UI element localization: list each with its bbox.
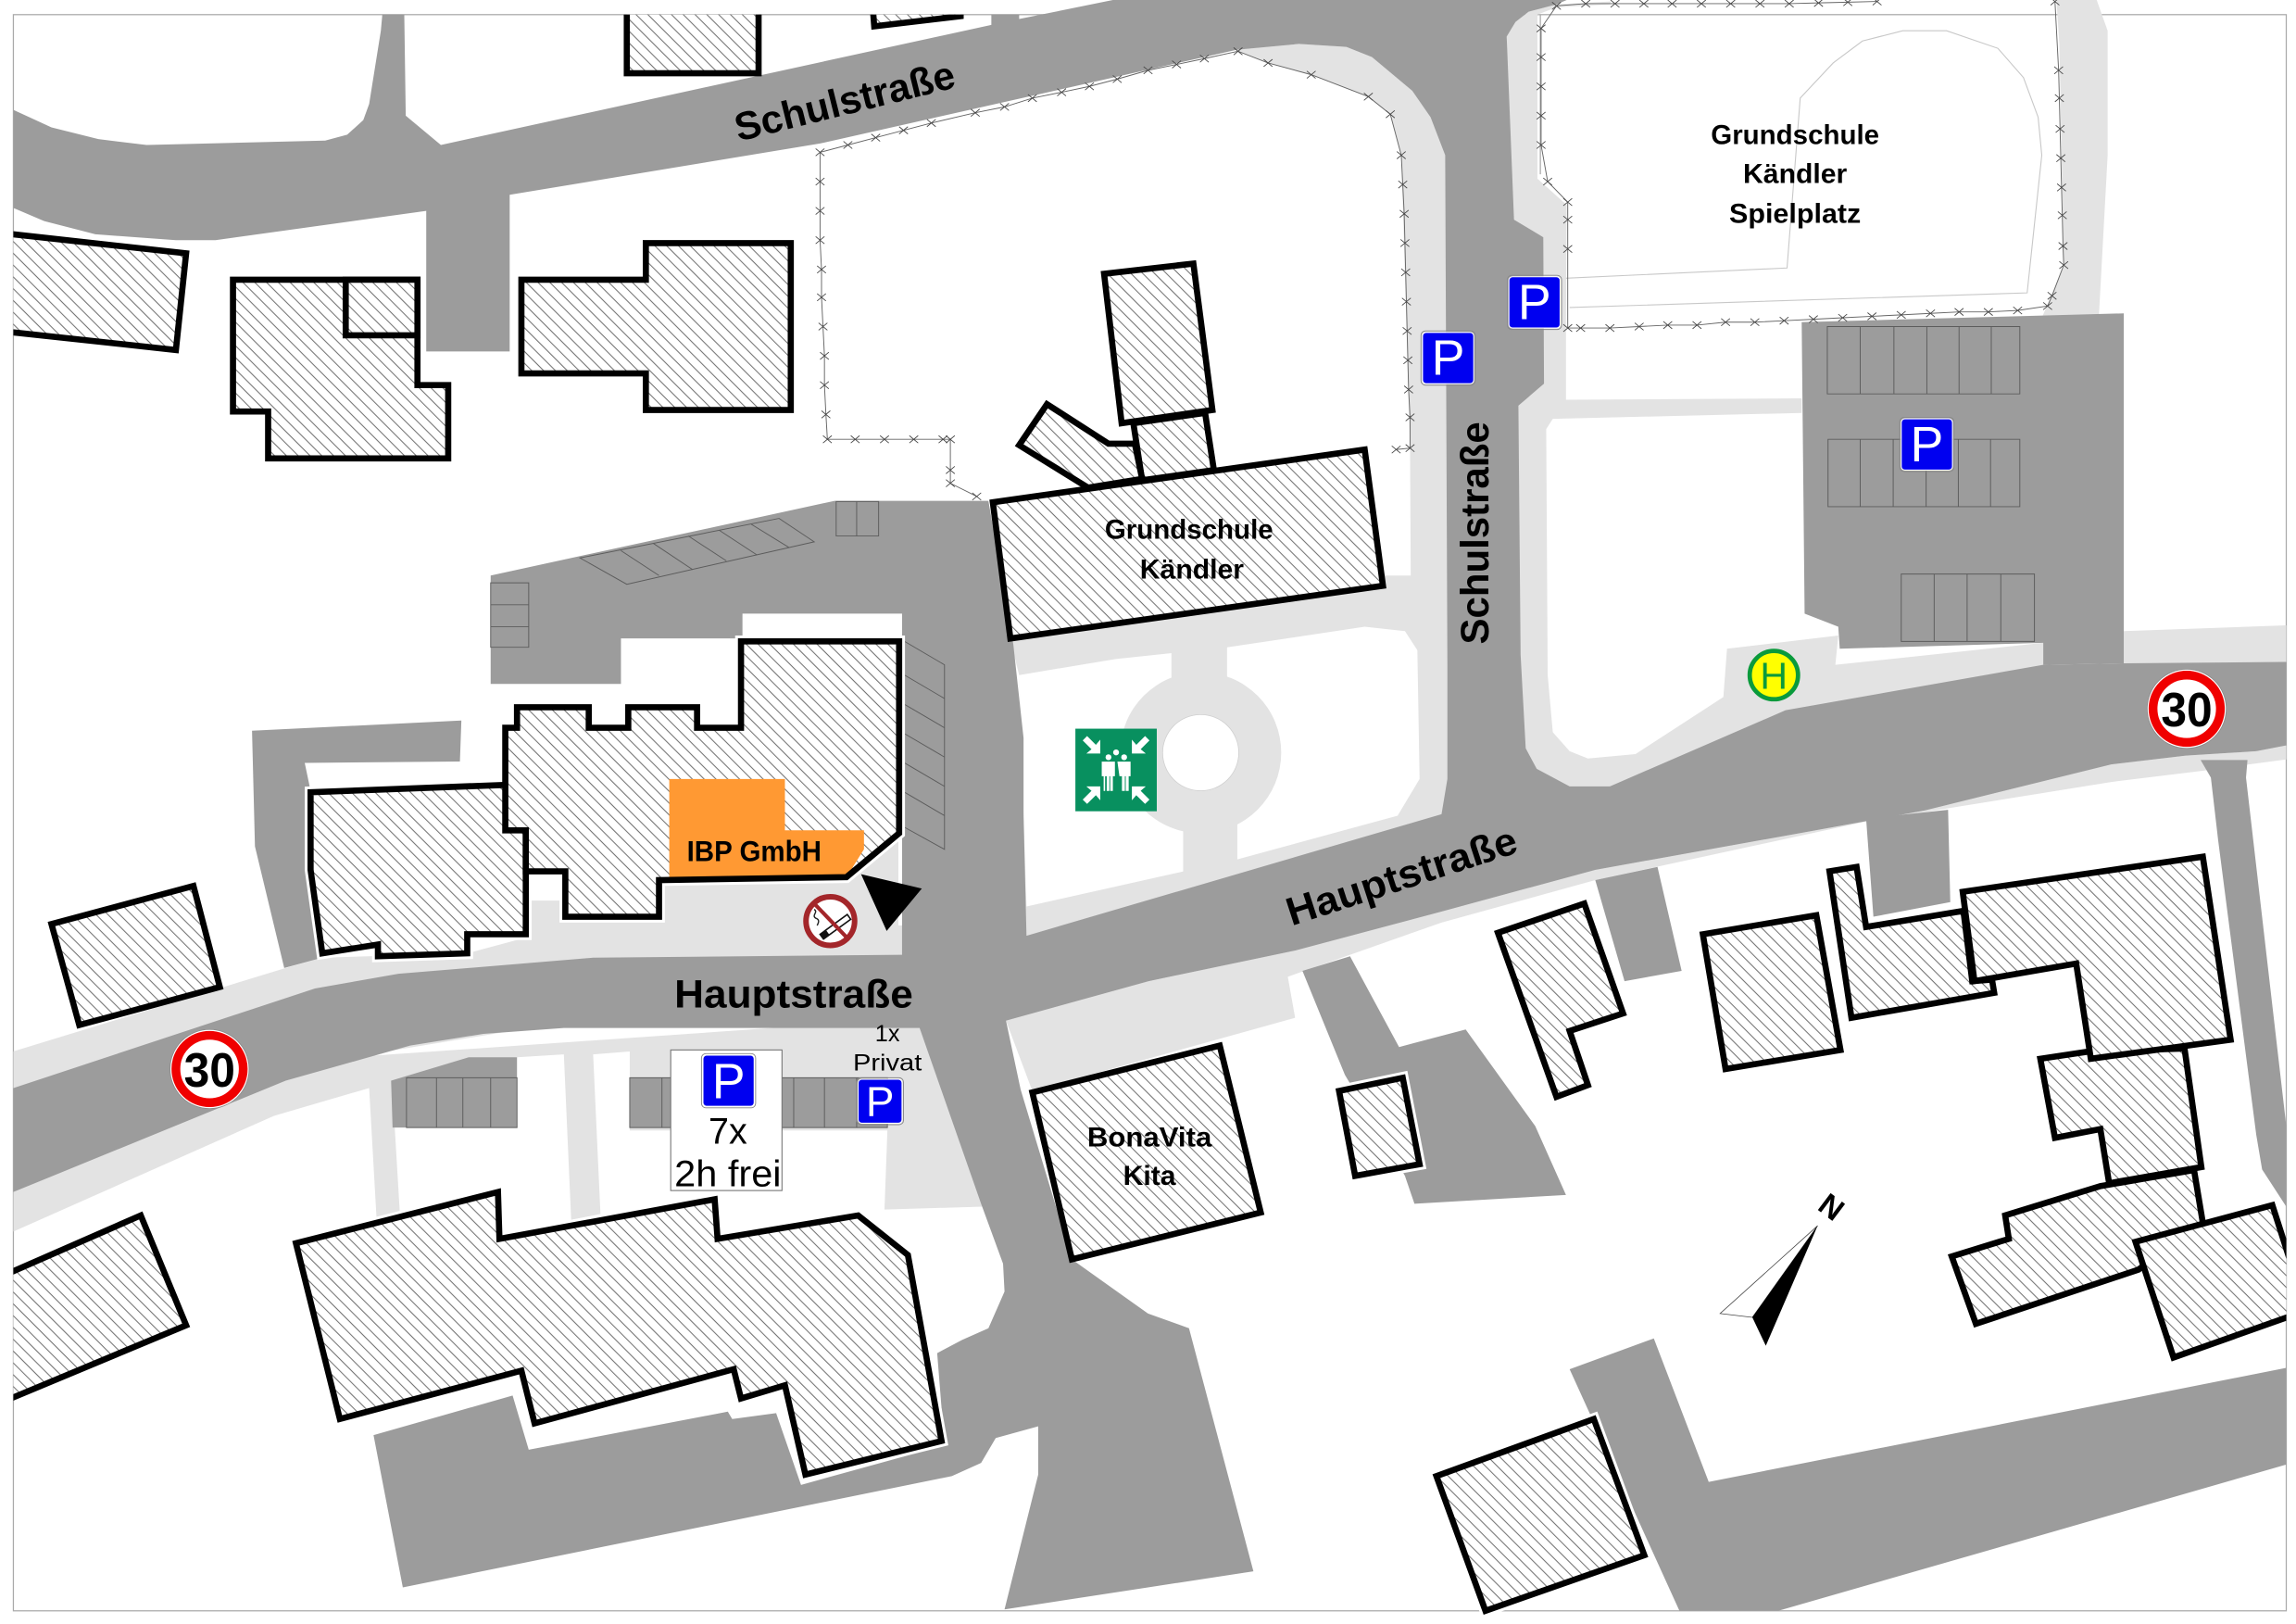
building: BonaVita Kita [1033,1046,1261,1259]
parking info: 1x Privat: 1x [875,1021,900,1047]
plaza with ring [1019,627,1420,906]
building: southwest house [0,1215,186,1403]
label: Grundschule Kändler Spielplatz: Grundschule [1711,120,1879,151]
parking stalls [407,326,2035,1127]
label: Grundschule Kändler [1105,515,1273,585]
parking info box: 7x 2h frei [671,1050,782,1194]
parking info box: 7x 2h frei: 2h frei [674,1153,782,1194]
building: top left [0,233,186,350]
white building margins [296,641,1644,1611]
fence: playground [1540,2,2064,328]
label: Schulstraße vertical: Schulstraße [1453,422,1498,645]
speed limit sign: west [170,1029,249,1109]
building: Grundschule Kändler main [993,449,1383,638]
north arrow: N [1812,1188,1851,1228]
speed limit sign: east: 30 [2161,684,2213,737]
entrance arrow [861,875,922,931]
assembly point sign [1075,729,1157,812]
building: west house [52,886,220,1025]
label: BonaVita Kita [1087,1123,1212,1191]
north arrow [1720,1188,1851,1346]
building: top edge B [871,15,963,30]
label: BonaVita Kita: BonaVita [1087,1123,1212,1153]
parking sign: Schulstraße east: P [1518,275,1551,331]
building: small shed [1339,1077,1420,1176]
parking sign: Schulstraße east [1508,275,1562,331]
playground outline [1566,31,2042,308]
building: large south block [296,1192,942,1475]
parking sign: school car park [1900,417,1954,472]
label: Schulstraße north: Schulstraße [730,53,960,150]
parking sign: Schulstraße west: P [1432,331,1464,386]
building: top edge A [623,15,761,76]
bus stop sign: H [1760,655,1788,698]
building: Grundschule Kändler wings [1019,264,1214,487]
building: east cluster [1829,857,2296,1357]
label: Hauptstraße east: Hauptstraße [1281,818,1523,935]
label: Grundschule Kändler Spielplatz [1711,120,1879,229]
label: Grundschule Kändler: Grundschule [1105,515,1273,546]
building: narrow house [1498,903,1623,1097]
parking info: 1x Privat: Privat [853,1050,922,1076]
parking info: 1x Privat [853,1021,922,1125]
building: square house [1703,915,1840,1069]
parking sign: Schulstraße west [1421,331,1475,386]
bus stop sign [1750,651,1798,699]
parking info: 1x Privat: P [866,1077,895,1125]
building: house west with annex [233,280,448,459]
label: BonaVita Kita: Kita [1123,1161,1176,1191]
label: Grundschule Kändler Spielplatz: Kändler [1743,159,1848,190]
fence: school grounds [820,51,1410,497]
label: IBP GmbH: IBP GmbH [687,834,822,867]
speed limit sign: east [2147,669,2227,749]
label: Grundschule Kändler Spielplatz: Spielplatz [1729,198,1861,229]
building: adjoining house west of IBP [310,785,526,956]
building: southeast house [1437,1419,1644,1611]
label: Hauptstraße west: Hauptstraße [674,973,913,1017]
building: house east of lane [521,243,791,410]
parking info box: 7x 2h frei: P [712,1054,746,1110]
parking sign: school car park: P [1911,417,1943,472]
sidewalks [13,0,2287,1231]
no smoking sign [806,897,855,946]
parking info box: 7x 2h frei: 7x [709,1112,747,1152]
label: Grundschule Kändler: Kändler [1140,554,1244,585]
building: IBP with orange office [506,641,899,917]
speed limit sign: west: 30 [184,1044,235,1098]
